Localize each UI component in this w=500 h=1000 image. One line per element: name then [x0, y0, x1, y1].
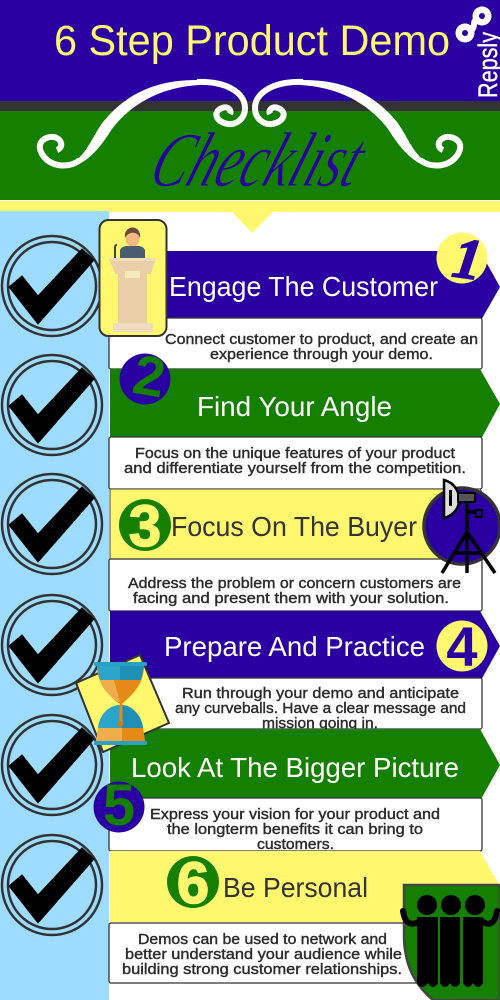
icon: number 4: 4	[446, 615, 478, 678]
icon: photo light on tripod	[424, 480, 500, 573]
panel: step 1 text	[109, 318, 482, 369]
icon: speaker at podium	[100, 220, 166, 336]
icon: check 2	[2, 355, 102, 455]
icon: number 6: 6	[177, 851, 209, 916]
panel: step 2 banner: Find Your Angle	[197, 391, 392, 422]
icon: check 1	[2, 236, 102, 336]
panel: step 2 text: Focus on the unique features of your product	[135, 445, 456, 462]
subtitle: Checklist: Checklist	[140, 117, 378, 203]
panel: step 5 banner: Look At The Bigger Picture	[131, 752, 459, 783]
panel: step 2 text	[109, 437, 482, 489]
icon: number 1: 1	[449, 224, 487, 293]
panel: step 4 text: mission going in.	[262, 715, 378, 732]
panel: step 1 banner	[109, 251, 500, 322]
flourish: left	[40, 80, 245, 167]
panel: step 2 banner	[110, 369, 500, 441]
panel: step 4 banner: Prepare And Practice	[164, 631, 425, 662]
panel: step 5 text: customers.	[257, 836, 334, 853]
logo: Repsly	[456, 6, 500, 98]
panel: step 6 text: better understand your audience while	[125, 946, 402, 963]
icon: number 6	[167, 851, 219, 916]
panel: step 4 text	[109, 678, 482, 732]
icon: number 5: 5	[103, 773, 135, 838]
panel: step 5 text	[109, 798, 482, 853]
panel: step 3 text: Address the problem or concern customers are	[128, 575, 461, 592]
panel: step 6 banner: Be Personal	[223, 872, 368, 903]
panel: step 1 banner: Engage The Customer	[169, 271, 438, 302]
icon: hourglass	[76, 655, 169, 752]
title: 6 Step Product Demo	[54, 17, 450, 65]
panel: step 4 text: any curveballs. Have a clear message and	[175, 700, 466, 717]
flourish: right	[255, 80, 460, 167]
panel: step 6 text	[109, 923, 482, 983]
panel: step 4 text: Run through your demo and anticipate	[182, 685, 459, 702]
icon: number 3	[119, 494, 171, 559]
panel: left check column	[0, 211, 109, 1000]
icon: check 4	[2, 595, 102, 695]
icon: check 5	[2, 715, 102, 815]
panel: step 5 text: Express your vision for your product and	[150, 806, 440, 823]
panel: step 2 text: and differentiate yourself from the competition.	[124, 460, 466, 477]
icon: number 2: 2	[129, 342, 170, 410]
panel: step 6 text: building strong customer relationships.	[122, 961, 402, 978]
panel: step 6 text: Demos can be used to network and	[138, 931, 387, 948]
panel: step 3 text	[109, 559, 482, 611]
panel: step 6 banner	[110, 851, 500, 922]
icon: number 4	[436, 615, 488, 678]
panel: step 5 text: the longterm benefits it can bring to	[167, 821, 423, 838]
panel: step 1 text: experience through your demo.	[210, 346, 433, 363]
icon: check 3	[2, 474, 102, 574]
icon: check 6	[2, 835, 102, 935]
icon: number 5	[94, 773, 144, 838]
panel: step 3 banner	[110, 489, 500, 559]
panel: step 3 text: facing and present them with your solution.	[133, 590, 449, 607]
icon: number 3: 3	[129, 494, 161, 559]
panel: step 1 text: Connect customer to product, and create an	[165, 331, 478, 348]
panel: header	[0, 0, 500, 233]
panel: step 4 banner	[110, 611, 500, 682]
icon: shield with three people	[403, 885, 500, 1000]
panel: step 5 banner	[110, 729, 500, 801]
panel: step 3 banner: Focus On The Buyer	[171, 511, 417, 542]
